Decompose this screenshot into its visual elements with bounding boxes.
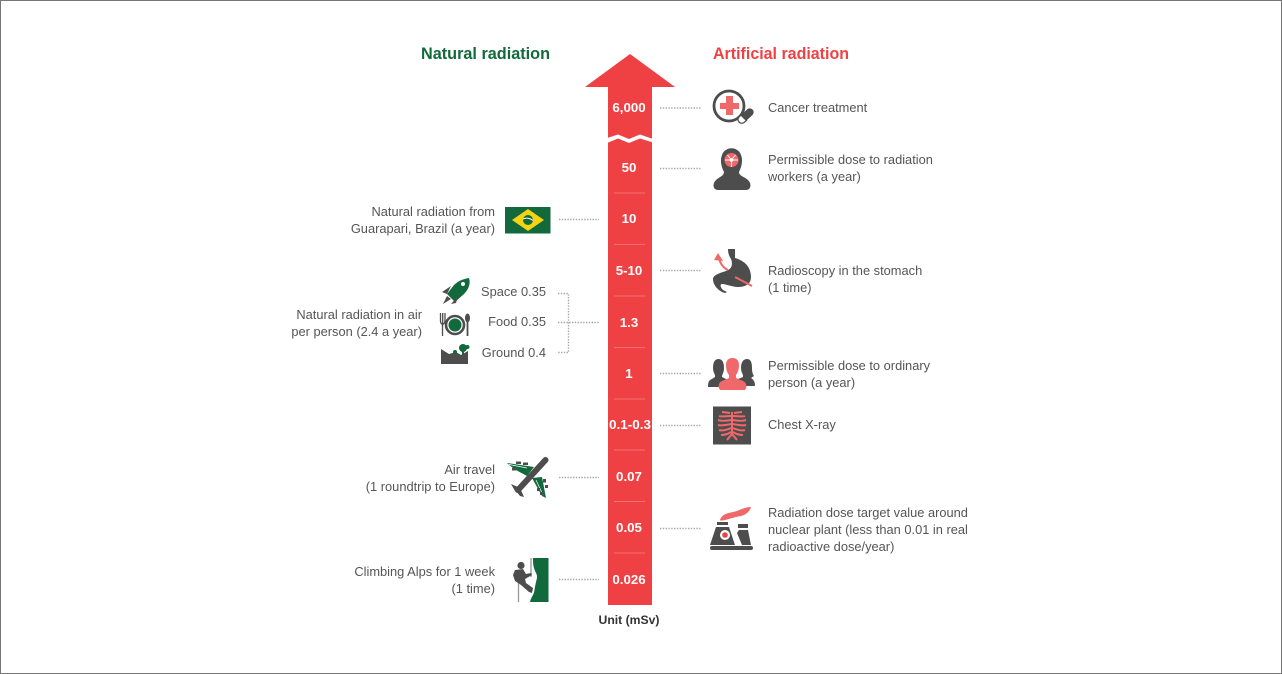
text: air travel bbox=[366, 462, 495, 494]
text: ordinary person: Permissible dose to ordinary bbox=[768, 358, 931, 373]
icon: airplane bbox=[507, 460, 548, 498]
text: radiation workers: workers (a year) bbox=[767, 169, 861, 184]
text: nuclear plant: radioactive dose/year) bbox=[768, 539, 894, 554]
text: cancer treatment: Cancer treatment bbox=[768, 100, 868, 115]
scale values: 50 bbox=[622, 160, 636, 175]
scale values: 0.026 bbox=[612, 572, 646, 587]
icon: rocket bbox=[442, 278, 470, 304]
text: natural radiation in air: Natural radiation in air bbox=[296, 307, 423, 322]
icon: ordinary people bbox=[708, 358, 755, 390]
scale values: 6,000 bbox=[612, 100, 646, 115]
text: guarapari: Guarapari, Brazil (a year) bbox=[351, 221, 495, 236]
text: nuclear plant bbox=[768, 505, 968, 554]
text: radiation workers: Permissible dose to radiation bbox=[768, 152, 933, 167]
text: radiation workers bbox=[767, 152, 933, 184]
text: climbing: (1 time) bbox=[451, 581, 495, 596]
text: ordinary person bbox=[768, 358, 931, 390]
icon: ground bbox=[441, 344, 470, 364]
text: space: Space 0.35 bbox=[481, 284, 546, 299]
scale values: 0.07 bbox=[616, 469, 642, 484]
icon: food bbox=[440, 313, 470, 336]
text: natural radiation in air: per person (2.4 a year) bbox=[291, 324, 422, 339]
icon: chest x-ray bbox=[713, 406, 751, 444]
text: food: Food 0.35 bbox=[488, 314, 546, 329]
scale values: 0.05 bbox=[616, 520, 643, 535]
text: climbing: Climbing Alps for 1 week bbox=[354, 564, 496, 579]
icon: radiation worker bbox=[714, 148, 750, 190]
scale values: 10 bbox=[622, 211, 636, 226]
scale values: 0.1-0.3 bbox=[609, 417, 651, 432]
scale values: 1.3 bbox=[620, 315, 638, 330]
icon: stomach bbox=[713, 249, 752, 293]
text: climbing bbox=[354, 564, 496, 596]
text: nuclear plant: Radiation dose target value around bbox=[768, 505, 968, 520]
text: natural radiation in air bbox=[291, 307, 423, 339]
scale arrow bbox=[585, 54, 675, 605]
icon: brazil flag bbox=[505, 207, 550, 234]
text: air travel: Air travel bbox=[444, 462, 495, 477]
scale values: 5-10 bbox=[616, 263, 642, 278]
heading: natural radiation: Natural radiation bbox=[421, 44, 550, 63]
dotted connectors bbox=[558, 108, 701, 580]
icon: cancer treatment bbox=[714, 91, 754, 123]
scale values bbox=[609, 100, 651, 587]
scale values: 1 bbox=[625, 366, 633, 381]
unit label: Unit (mSv) bbox=[599, 613, 659, 627]
text: guarapari: Natural radiation from bbox=[372, 204, 495, 219]
text: radioscopy bbox=[768, 263, 922, 295]
text: radioscopy: (1 time) bbox=[768, 280, 812, 295]
text: chest x-ray: Chest X-ray bbox=[768, 417, 836, 432]
text: nuclear plant: nuclear plant (less than 0.01 in real bbox=[768, 522, 968, 537]
text: ordinary person: person (a year) bbox=[768, 375, 855, 390]
heading: artificial radiation: Artificial radiation bbox=[713, 44, 849, 63]
icon: nuclear plant bbox=[710, 507, 753, 550]
text: radioscopy: Radioscopy in the stomach bbox=[768, 263, 922, 278]
text: air travel: (1 roundtrip to Europe) bbox=[366, 479, 495, 494]
text: guarapari bbox=[351, 204, 495, 236]
icon: climber bbox=[513, 558, 548, 602]
text: ground: Ground 0.4 bbox=[482, 345, 546, 360]
